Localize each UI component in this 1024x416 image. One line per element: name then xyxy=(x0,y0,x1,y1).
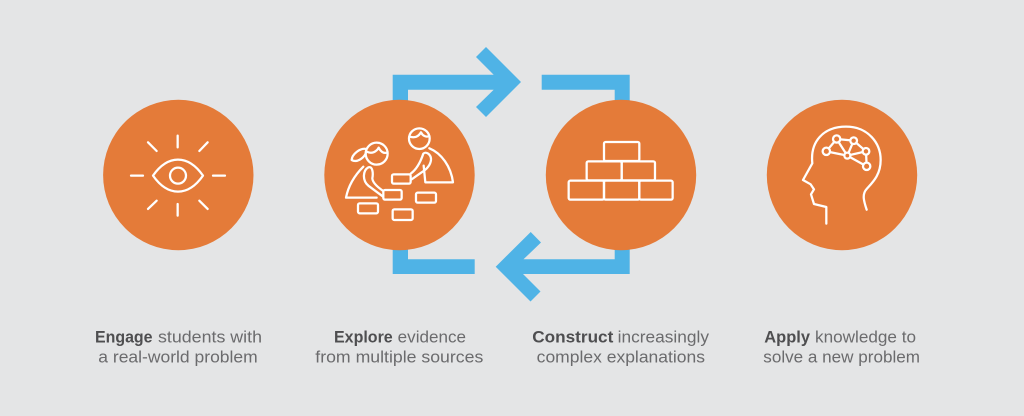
caption: explore: Explore xyxy=(334,328,393,347)
circle: engage xyxy=(103,100,254,250)
caption: construct xyxy=(532,328,710,367)
arrow: top, explore to construct xyxy=(393,47,630,117)
caption: construct: complex explanations xyxy=(537,348,705,367)
circle: apply xyxy=(767,100,917,250)
caption: apply: solve a new problem xyxy=(763,348,920,367)
caption: engage xyxy=(95,328,262,367)
step 4: apply icon xyxy=(767,100,917,250)
caption: construct: increasingly xyxy=(618,328,710,347)
caption: construct: Construct xyxy=(532,328,614,347)
caption: apply: knowledge to xyxy=(815,328,916,347)
caption: explore xyxy=(315,328,483,367)
caption: engage: a real-world problem xyxy=(98,348,258,367)
step 3: construct icon xyxy=(546,100,696,250)
caption: engage: students with xyxy=(158,328,262,347)
step 2: explore icon xyxy=(324,100,475,250)
circle: construct xyxy=(546,100,696,250)
caption: engage: Engage xyxy=(95,328,152,347)
caption: apply xyxy=(763,328,920,367)
caption: explore: evidence xyxy=(398,328,466,347)
caption: explore: from multiple sources xyxy=(315,348,483,367)
arrow: bottom, construct to explore xyxy=(393,232,630,302)
circle: explore xyxy=(324,100,475,250)
step 1: engage icon xyxy=(103,100,254,250)
caption: apply: Apply xyxy=(764,328,811,347)
